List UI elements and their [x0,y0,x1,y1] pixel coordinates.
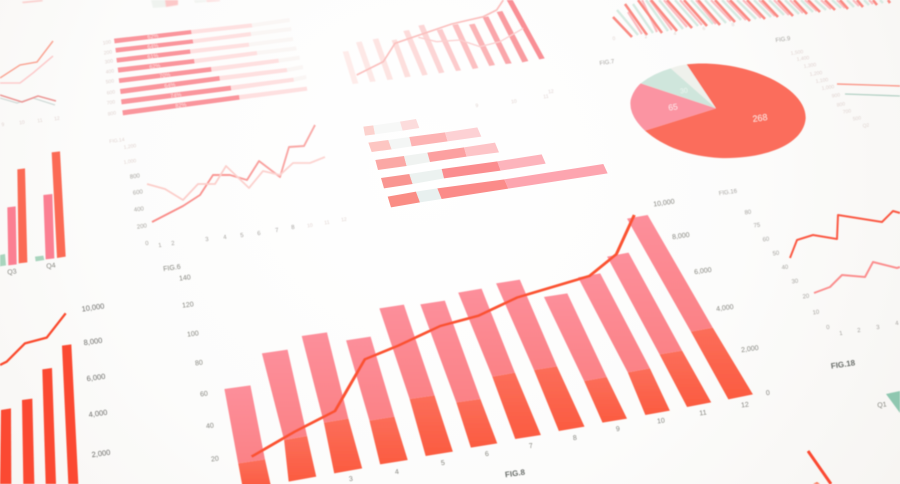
x axis labels: 3 [205,237,210,243]
slice: pale grey [671,64,716,108]
axis labels: 11 [543,94,549,100]
axis labels: 10 [511,99,517,105]
chart fragment: bottom red line [808,451,831,484]
axis labels [81,301,111,459]
row 4 [381,154,546,188]
y axis labels: 1,000 [123,158,137,166]
trend line: rising [357,0,503,75]
y axis labels: 600 [133,189,144,197]
axis ticks: 12 [54,116,60,122]
figure labels: upper right [599,36,791,67]
slice: mint green [641,68,716,108]
row 1 [363,119,419,136]
line: red series [790,211,900,258]
Q4 green bar [35,256,44,261]
x axis labels: 5 [240,233,245,239]
chart title: FIG.18 [830,358,856,371]
x axis labels: 12 [341,217,347,223]
row labels [102,39,117,118]
chart: far right small line chart [790,49,900,129]
light bar segments [190,23,307,100]
trend line [252,215,634,457]
chart: right line chart FIG.18 [744,210,900,371]
figure label: FIG.16: FIG.16 [719,189,738,197]
row 2 [368,127,481,152]
percent labels: 62% [147,33,159,41]
chart: left grouped quarterly bars [0,151,66,277]
month labels: 12 [741,401,749,410]
x axis labels [158,217,347,249]
percent labels [147,33,187,110]
y axis labels: 40 [781,265,789,271]
x axis labels: 3 [876,325,881,331]
Q3 pink bar [7,206,17,265]
right axis labels: 0 [766,390,771,397]
x axis labels: 1 [839,331,844,337]
axis labels: 4,000 [88,408,108,419]
pink bars [628,0,873,34]
bar axis labels: 6 [702,26,706,32]
percent labels: 70% [159,72,171,80]
green line [845,94,900,96]
trend line: second series [418,28,523,47]
month labels: 11 [699,410,707,417]
axis labels: 6,000 [86,372,106,383]
axis ticks: 10 [19,120,25,126]
y axis labels: 1,200 [123,143,137,151]
left axis labels: 40 [206,422,214,431]
y axis labels: 30 [791,279,799,285]
right axis labels: 4,000 [716,304,734,313]
pie values: 65 [668,101,679,113]
Q3 red bar [17,168,27,263]
bar axis labels: 0 [612,36,616,42]
right axis labels: 2,000 [741,345,759,354]
axis labels: 2,000 [91,448,111,459]
axis ticks [1,116,60,128]
Q4 red bar [52,151,66,258]
x axis labels: 2 [857,328,862,334]
green bars [617,0,883,35]
left axis labels: 120 [182,301,194,310]
month labels: 4 [395,469,400,476]
axis labels: 900 [831,92,841,100]
left axis labels: 60 [200,390,208,399]
row labels: 200 [103,49,113,57]
right axis labels: 8,000 [672,232,690,241]
right axis labels: 6,000 [694,267,712,276]
axis labels: 1,300 [803,62,817,70]
row labels: 500 [105,78,115,86]
axis labels: 1,500 [790,49,804,57]
line: pink series [814,262,900,293]
y axis labels: 75 [753,223,761,229]
pie values: 268 [752,112,768,124]
axis labels: 9 [475,103,479,109]
axis labels: 500 [852,115,862,123]
x axis labels: 2 [171,241,176,247]
slice: pink 65 [630,83,716,131]
percent labels: 64% [147,43,159,51]
right axis labels [653,199,771,397]
x axis labels: 6 [257,231,262,237]
figure label: FIG.6: FIG.6 [163,264,181,273]
line: light series [147,157,325,200]
row labels: 300 [104,58,114,66]
chart fragment: top edge bars [22,0,220,8]
axis labels: Q2 [862,123,870,129]
x axis labels: 4 [895,321,900,327]
x axis labels: 11 [324,220,330,226]
red bars [0,344,78,484]
y axis labels: 0 [826,325,831,331]
quarter labels [7,262,56,277]
row labels: 100 [102,39,112,47]
axis labels: 1,400 [796,55,810,63]
row 5 [388,164,608,207]
y axis labels [744,210,831,331]
row labels: 400 [105,68,115,76]
bars: lower red segments [238,328,753,484]
x axis labels: 10 [307,223,313,229]
chart: top-right dense paired bars [612,0,890,42]
row labels: 800 [107,110,117,118]
month labels: 7 [529,443,534,450]
bar axis labels [612,22,735,42]
line: dark series [152,125,315,222]
green bar [886,391,900,413]
faded vertical bars [343,0,545,84]
quarter labels: Q3 [7,268,17,277]
pie values: 30 [680,87,688,96]
x axis labels: 4 [223,235,228,241]
line: orange series [0,41,53,78]
bar axis labels: 8 [731,22,735,28]
left axis labels: 20 [211,455,219,464]
row 3 [375,143,499,170]
percent labels: 64% [164,82,176,90]
month labels [349,401,749,483]
axis labels: 1,200 [809,70,823,78]
y axis labels: 20 [802,294,810,300]
axis labels: 12 [548,89,554,95]
dark bar segments [114,30,240,115]
y axis labels: 800 [130,173,141,181]
left axis labels: 80 [195,359,203,368]
row labels: 700 [106,99,116,107]
axis ticks: 11 [37,118,43,124]
chart title: FIG.14 [109,137,125,145]
percent labels: 62% [149,63,161,71]
y axis labels: 10 [812,310,820,316]
y axis labels: 400 [134,206,145,214]
chart: FIG.14 line chart [109,125,347,249]
row labels: 600 [106,89,116,97]
axis labels: 1,100 [815,77,829,85]
quarter labels: Q4 [46,262,56,271]
figure labels: upper right: FIG.9 [775,36,791,44]
left axis labels: 140 [179,274,191,283]
figure labels: upper right: FIG.7 [599,59,615,67]
percent labels: 82% [175,102,187,110]
chart: main bar and line chart FIG.8 [179,199,771,484]
x axis labels [839,321,900,337]
Q3 green bar [0,254,6,266]
bar axis labels: 2 [644,34,648,40]
slice: red 268 [645,64,806,158]
axis labels [790,49,870,129]
trend line [0,313,66,365]
month labels: 5 [441,460,446,467]
chart: upper bar and line combination [343,0,554,109]
y axis labels: 50 [772,251,780,257]
month labels: 10 [657,417,665,426]
y axis labels: 80 [744,210,752,216]
x axis labels: 8 [291,225,296,231]
red line [837,84,900,86]
line: grey series [0,98,55,105]
y axis labels: 0 [145,241,150,247]
axis labels: 8,000 [83,336,103,347]
axis labels [475,89,554,109]
left axis labels: 100 [187,330,199,339]
chart: bottom-left red bars and line [0,301,111,484]
chart: pie chart [630,64,806,158]
chart fragment: bottom right green bar [877,391,900,413]
percent labels: 74% [170,92,182,100]
chart: stacked horizontal bars [363,119,608,207]
very light bar segments [249,18,307,82]
axis ticks: 9 [1,122,5,128]
y axis labels: 200 [137,223,148,231]
axis labels: 700 [842,108,852,116]
x axis labels: 1 [158,243,163,249]
line: pink series [0,56,53,83]
percent labels: 61% [147,53,159,61]
month labels: 9 [616,426,621,433]
month labels: 6 [485,451,490,458]
left axis labels [179,274,219,464]
axis labels: 800 [836,101,846,109]
bars: upper pink segments [224,215,713,463]
y axis labels [123,143,150,247]
bar axis labels: 4 [673,31,677,37]
line: red series [0,95,56,102]
chart title: FIG.8 [504,468,526,479]
Q1 label: Q1 [877,401,887,410]
Q4 pink bar [43,194,54,259]
chart: horizontal percentage bars [102,18,307,118]
axis labels: 1,000 [821,84,835,92]
right axis labels: 10,000 [653,199,675,208]
y axis labels: 60 [762,237,770,243]
month labels: 8 [573,435,578,442]
axis labels: 10,000 [81,301,105,314]
month labels: 3 [349,476,354,483]
pie values [668,87,768,124]
chart: top-left line chart [0,41,60,128]
x axis labels: 7 [275,228,280,234]
red bars [613,0,890,37]
